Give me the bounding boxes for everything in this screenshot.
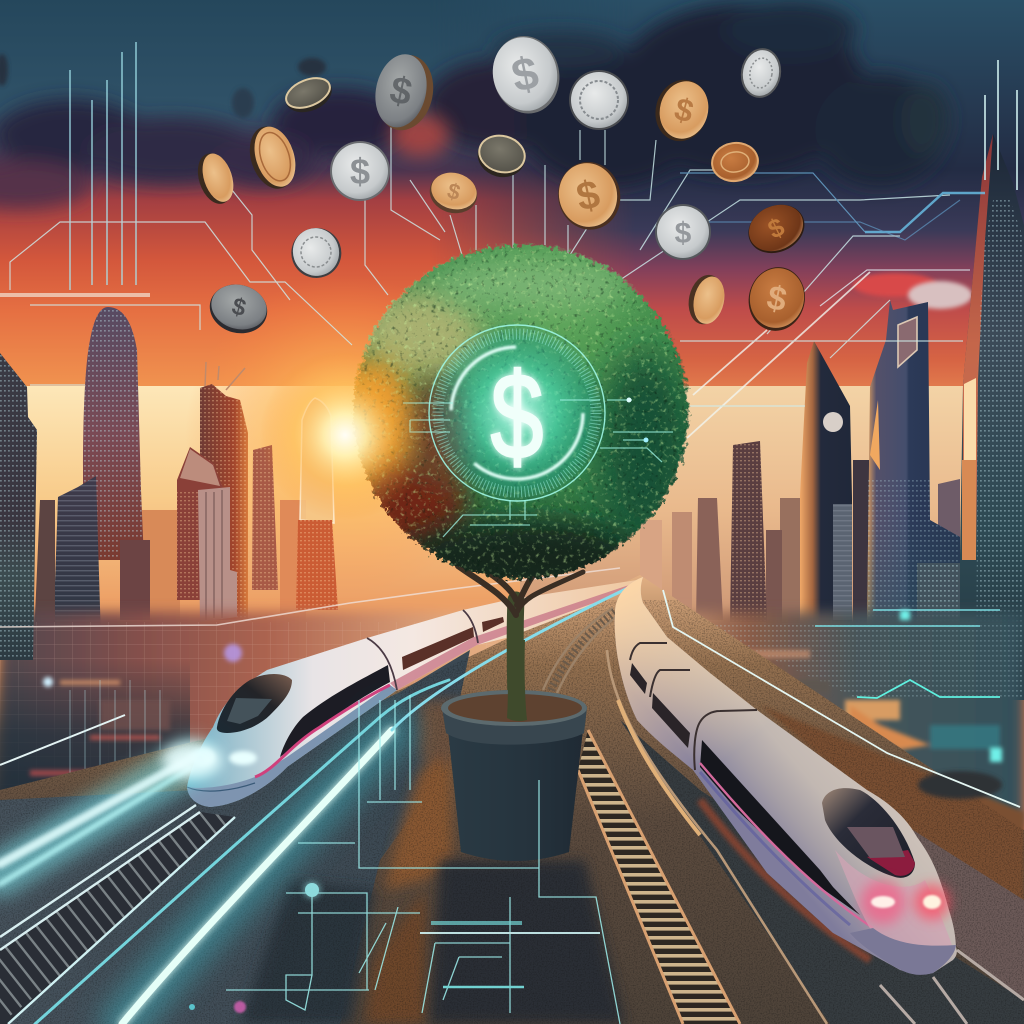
coin bbox=[330, 141, 390, 201]
coin bbox=[486, 30, 567, 120]
coin: $ bbox=[764, 278, 790, 320]
windshield bbox=[217, 674, 292, 733]
blue twin tower bbox=[867, 300, 960, 690]
coin: $ bbox=[386, 69, 416, 115]
left railway tracks bbox=[0, 805, 235, 1024]
foreground circuit overlay bbox=[189, 695, 620, 1024]
coin bbox=[368, 49, 440, 136]
pot bbox=[441, 640, 587, 861]
windshield bbox=[822, 788, 915, 878]
coin: $ bbox=[507, 46, 543, 102]
windows bbox=[700, 740, 860, 915]
right mid-ground city bbox=[630, 610, 1024, 830]
coin bbox=[204, 278, 273, 340]
coin bbox=[569, 70, 629, 130]
coin: $ bbox=[573, 172, 604, 220]
coin bbox=[708, 139, 762, 185]
dark patches and pot shadow bbox=[240, 860, 625, 1024]
sun flare over crown bbox=[260, 350, 430, 520]
coin bbox=[684, 272, 729, 328]
coin: $ bbox=[350, 151, 370, 192]
coin bbox=[281, 71, 337, 119]
coin bbox=[740, 196, 812, 262]
glowing dollar emblem bbox=[403, 321, 673, 537]
glowing dollar emblem: $ bbox=[491, 349, 543, 485]
floating coins bbox=[192, 30, 812, 340]
ground bbox=[0, 575, 1024, 1024]
centre railway track bbox=[543, 608, 827, 1024]
wedge tower with round window bbox=[800, 341, 863, 655]
coin: $ bbox=[763, 211, 789, 245]
dark clouds bbox=[0, 2, 972, 309]
coin: $ bbox=[229, 293, 249, 322]
coin: $ bbox=[671, 90, 697, 130]
right city towers bbox=[730, 134, 1024, 700]
nose collar bbox=[835, 850, 952, 951]
slate ground on the left bbox=[0, 650, 470, 1024]
coin bbox=[425, 167, 482, 218]
right railway track bbox=[880, 950, 1024, 1024]
coin bbox=[284, 221, 348, 285]
coin bbox=[192, 149, 239, 208]
circuit lines across sky bbox=[0, 42, 1017, 438]
tree crown bbox=[328, 245, 691, 600]
coin bbox=[473, 129, 530, 182]
coin bbox=[655, 204, 711, 260]
right ground: earth, reddish gravel and dark ballast bbox=[760, 705, 1024, 905]
coin bbox=[737, 45, 785, 101]
coin: $ bbox=[675, 217, 692, 250]
coin bbox=[743, 262, 811, 336]
distant hazy skyline bbox=[140, 498, 800, 630]
red-brown tower with cranes bbox=[200, 362, 248, 620]
coin bbox=[649, 74, 715, 147]
light streaks bbox=[0, 587, 630, 1024]
trunk and branches bbox=[458, 566, 583, 715]
potted tree bbox=[260, 245, 691, 861]
sun glow bbox=[185, 275, 505, 595]
left bullet train bbox=[187, 580, 637, 807]
coin bbox=[552, 156, 627, 235]
left mid-ground city bbox=[0, 353, 640, 822]
left city towers bbox=[34, 307, 338, 640]
tall spire tower bbox=[960, 134, 1024, 700]
coin: $ bbox=[445, 178, 463, 205]
tall rounded tower bbox=[83, 307, 144, 560]
headlights bbox=[861, 880, 905, 924]
coin bbox=[242, 120, 303, 195]
orange earth patches bbox=[365, 700, 470, 1024]
right bullet train bbox=[615, 577, 957, 975]
car joints bbox=[630, 643, 757, 770]
left dark glass tower, in front of the blended city base bbox=[0, 353, 37, 660]
